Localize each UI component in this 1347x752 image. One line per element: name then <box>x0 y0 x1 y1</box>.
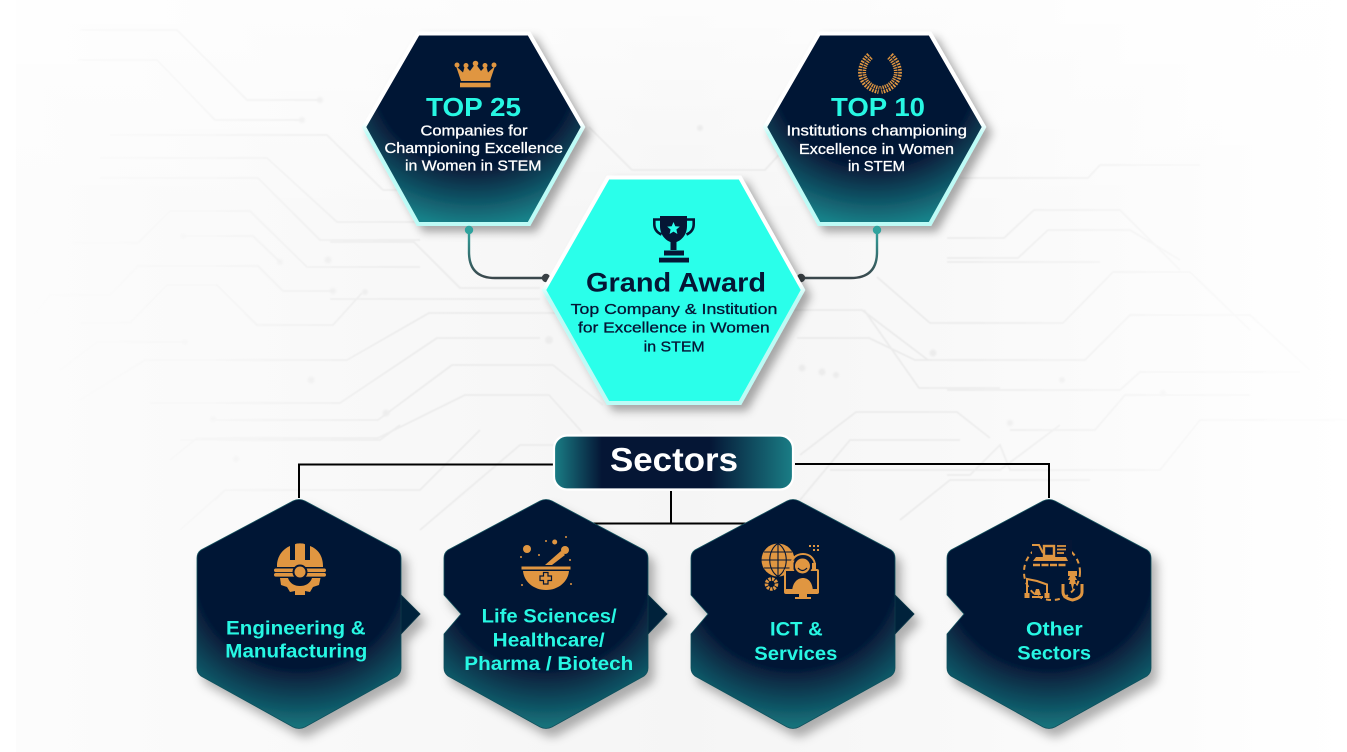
icon: crown <box>454 61 496 87</box>
icon: machinery and drill <box>1024 540 1082 600</box>
hexagon with arrow and notch <box>444 500 667 728</box>
label: Other Sectors: Sectors <box>1017 642 1091 664</box>
label: ICT and Services: Services <box>754 643 837 665</box>
label: Engineering and Manufacturing: Engineering & <box>226 617 366 639</box>
text: Top 10 description: Institutions championing <box>786 124 967 140</box>
hexagon with notch <box>947 500 1151 728</box>
icon: trophy <box>654 216 694 262</box>
panel: Grand Award <box>544 178 803 403</box>
label: Life Sciences, Healthcare, Pharma and Biotech: Healthcare/ <box>493 630 605 652</box>
label: Other Sectors: Other <box>1026 619 1083 641</box>
label: Life Sciences, Healthcare, Pharma and Biotech <box>464 606 633 675</box>
connector: Sectors to Engineering <box>299 464 553 498</box>
icon: globe and support agent <box>762 544 819 599</box>
label: ICT and Services: ICT & <box>770 619 823 641</box>
connector: Top 25 to Grand Award <box>465 226 550 282</box>
connector: Sectors to Life Sciences and ICT <box>585 491 750 524</box>
heading: Grand Award: Grand Award <box>586 268 766 298</box>
text: Top 25 description: Championing Excellence <box>384 141 563 157</box>
label: Engineering and Manufacturing: Manufacturing <box>225 641 367 663</box>
label: ICT and Services <box>754 619 837 665</box>
heading: Top 10: TOP 10 <box>831 92 925 122</box>
icon: laurel wreath <box>862 56 898 90</box>
label: Life Sciences, Healthcare, Pharma and Biotech: Life Sciences/ <box>482 606 617 628</box>
icon: helmet with gear <box>274 543 326 595</box>
text: Top 25 description <box>384 124 563 175</box>
hexagon: Top 10 <box>765 34 984 224</box>
panel: Life Sciences, Healthcare, Pharma and Biotech <box>444 500 667 728</box>
text: Top 10 description: in STEM <box>848 159 905 175</box>
heading box: Sectors: Sectors <box>610 441 738 478</box>
connector: Sectors to Other Sectors <box>795 464 1049 498</box>
text: Grand Award description: in STEM <box>644 339 705 356</box>
text: Top 10 description <box>786 124 967 175</box>
panel: Other Sectors <box>947 500 1151 728</box>
panel: ICT and Services <box>691 500 914 728</box>
label: Life Sciences, Healthcare, Pharma and Biotech: Pharma / Biotech <box>464 653 633 675</box>
text: Grand Award description: Top Company & Institution <box>571 301 777 318</box>
hexagon: Grand Award <box>544 178 803 403</box>
icon: mortar and pestle <box>520 536 572 590</box>
panel: Engineering and Manufacturing <box>197 500 420 728</box>
label: Other Sectors <box>1017 619 1091 664</box>
heading box: Sectors <box>554 436 793 490</box>
text: Top 25 description: Companies for <box>420 124 528 140</box>
hexagon: Top 25 <box>364 34 583 224</box>
hexagon with arrow and notch <box>691 500 914 728</box>
heading: Top 25: TOP 25 <box>426 92 521 122</box>
panel: Top 10 <box>765 34 984 224</box>
text: Top 10 description: Excellence in Women <box>799 142 954 158</box>
label: Engineering and Manufacturing <box>225 617 367 663</box>
text: Grand Award description: for Excellence in Women <box>578 320 770 337</box>
panel: Top 25 <box>364 34 583 224</box>
hexagon with arrow <box>197 500 420 728</box>
text: Top 25 description: in Women in STEM <box>405 159 542 175</box>
connector: Top 10 to Grand Award <box>797 226 881 282</box>
text: Grand Award description <box>571 301 777 356</box>
